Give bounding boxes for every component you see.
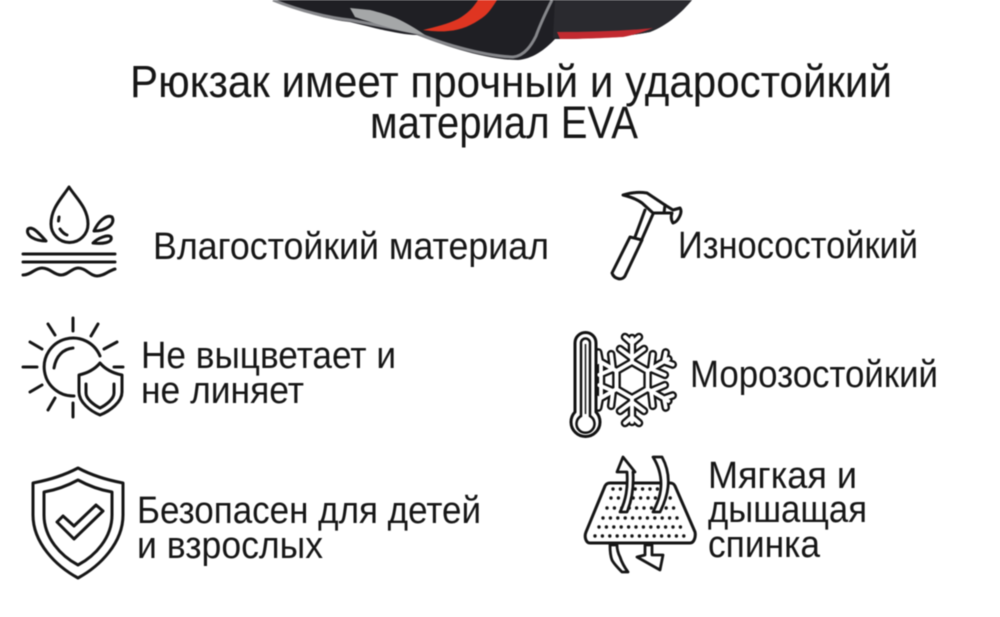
text: does not fade: Не выцветает и [141,335,396,377]
icon: shield with check mark [33,468,123,578]
text: water resistant: Влагостойкий материал [153,226,549,268]
text: frost resistant: Морозостойкий [690,354,938,396]
text: safe for children and adults: и взрослых [137,525,323,567]
backpack photo [273,0,692,60]
text: soft breathable back: Мягкая и [708,455,857,497]
text: soft breathable back: дышащая [708,489,867,531]
title: материал EVA [370,97,638,148]
padding block [585,483,695,543]
down arrow [637,545,663,570]
up arrow [617,457,635,512]
title [130,56,892,148]
curved arrow right [653,457,668,512]
text: does not fade [141,335,396,412]
text: does not fade: не линяет [141,370,304,412]
curved arrow lower left [610,545,628,572]
text: soft breathable back [708,455,867,566]
icon: sun with shield [23,318,123,417]
icon: hammer [612,192,681,279]
text: soft breathable back: спинка [708,524,821,566]
icon: breathable padding with arrows [585,457,695,572]
icon: water drop [23,187,115,276]
text: wear resistant: Износостойкий [678,225,918,267]
icon: thermometer and snowflake [571,332,675,436]
text: safe for children and adults [137,490,481,567]
title: Рюкзак имеет прочный и ударостойкий [130,56,892,107]
text: safe for children and adults: Безопасен для детей [137,490,481,532]
